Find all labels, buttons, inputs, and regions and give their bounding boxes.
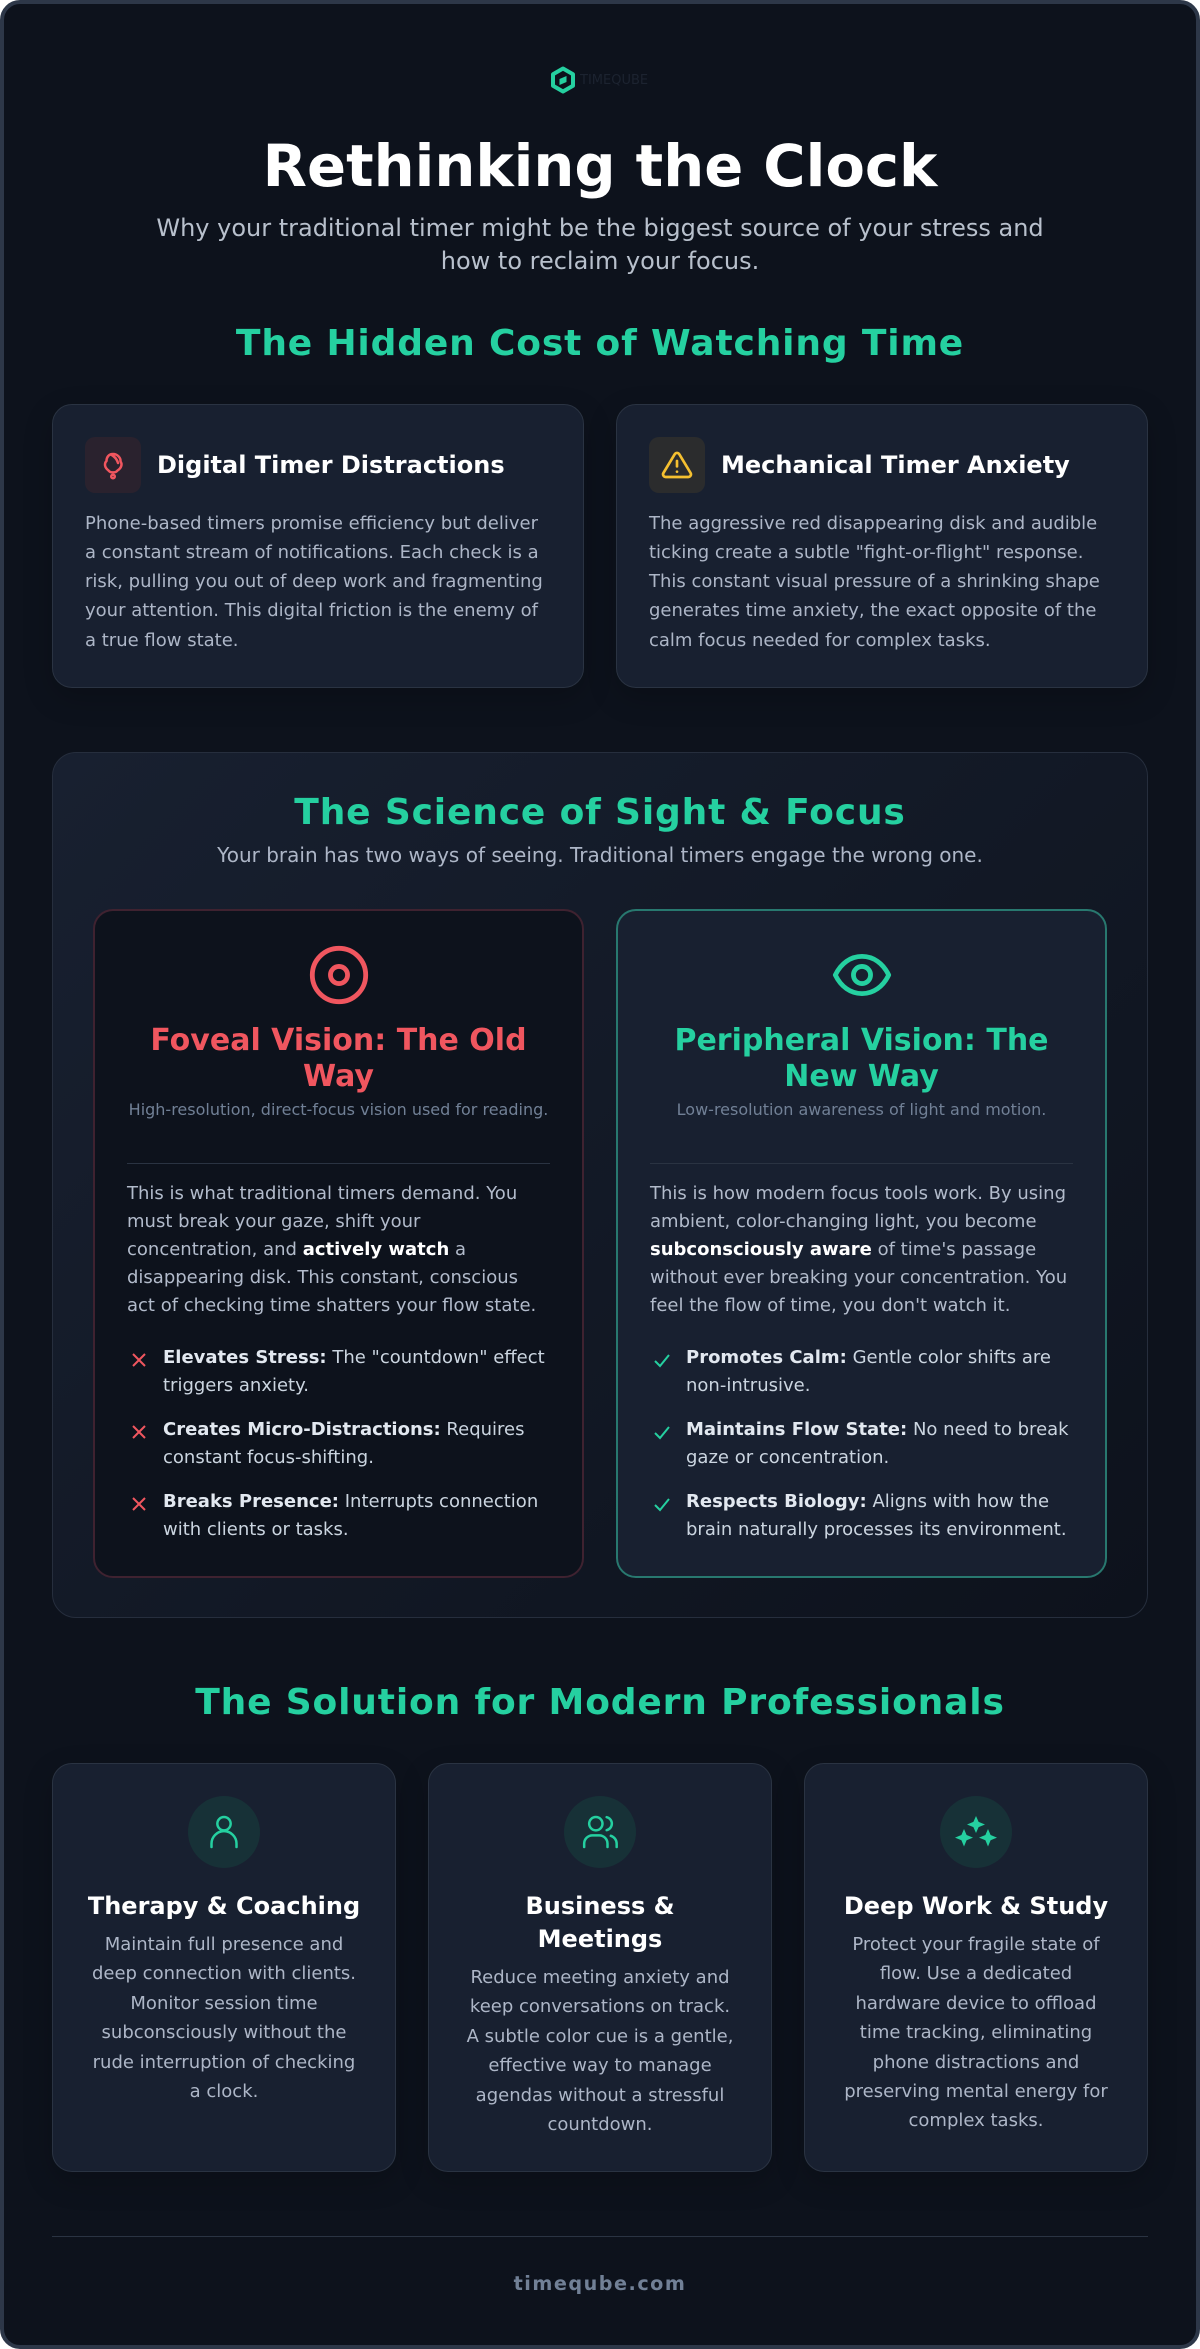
heading: solution: The Solution for Modern Professionals — [195, 1682, 1005, 1722]
foveal list item: presence: Breaks Presence: Interrupts connection — [163, 1491, 538, 1512]
card text: agendas without a stressful — [476, 2085, 724, 2106]
card text — [85, 512, 543, 651]
card title — [525, 1892, 675, 1953]
peripheral paragraph — [650, 1182, 1067, 1316]
peripheral list item: biology: brain naturally processes its environment. — [686, 1519, 1067, 1540]
card text: complex tasks. — [908, 2110, 1044, 2131]
peripheral subtitle: Low-resolution awareness of light and motion. — [677, 1100, 1046, 1119]
panel: science of sight and focus — [52, 752, 1148, 1618]
foveal paragraph: This is what traditional timers demand. You — [127, 1182, 517, 1204]
panel: deep work and study — [804, 1763, 1148, 2172]
icon: eye — [832, 954, 892, 996]
card title: Mechanical Timer Anxiety — [721, 451, 1070, 479]
card text — [92, 1934, 356, 2102]
card text: a constant stream of notifications. Each check is a — [85, 542, 539, 563]
card text: A subtle color cue is a gentle, — [467, 2026, 733, 2047]
card text: a clock. — [190, 2081, 258, 2102]
foveal heading — [150, 1022, 527, 1094]
card text: Phone-based timers promise efficiency but deliver — [85, 512, 538, 534]
card title: Therapy & Coaching — [88, 1892, 360, 1920]
card text: effective way to manage — [488, 2055, 712, 2076]
peripheral list item: calm: Promotes Calm: Gentle color shifts are — [686, 1347, 1051, 1368]
peripheral list item: flow: Maintains Flow State: No need to break — [686, 1419, 1069, 1440]
card text: hardware device to offload — [855, 1993, 1097, 2014]
card text: Reduce meeting anxiety and — [470, 1967, 730, 1988]
card text: time tracking, eliminating — [860, 2022, 1092, 2043]
panel: business and meetings — [428, 1763, 772, 2172]
card text: countdown. — [547, 2114, 653, 2135]
icon: sparkles — [940, 1796, 1012, 1868]
card text: rude interruption of checking — [93, 2052, 355, 2073]
foveal list item: stress — [132, 1347, 545, 1396]
foveal list item: presence — [132, 1491, 538, 1540]
card title: Digital Timer Distractions — [157, 451, 505, 479]
card text: This constant visual pressure of a shrinking shape — [649, 571, 1100, 592]
peripheral list item: calm: non-intrusive. — [686, 1375, 810, 1396]
card text: The aggressive red disappearing disk and audible — [649, 512, 1097, 534]
foveal list item: distractions: constant focus-shifting. — [163, 1447, 374, 1468]
card text: deep connection with clients. — [92, 1963, 356, 1984]
foveal paragraph — [126, 1182, 536, 1316]
icon: hexagon cube — [551, 66, 575, 94]
panel: peripheral vision — [616, 909, 1107, 1578]
peripheral list item: flow — [654, 1419, 1069, 1468]
heading: science: The Science of Sight & Focus — [294, 792, 906, 832]
card title: Meetings — [538, 1925, 662, 1953]
peripheral paragraph: ambient, color-changing light, you become — [650, 1211, 1037, 1232]
foveal subtitle: High-resolution, direct-focus vision used for reading. — [129, 1100, 548, 1119]
card text — [844, 1934, 1108, 2131]
panel: therapy and coaching — [52, 1763, 396, 2172]
footer: timeqube.com — [514, 2272, 686, 2294]
peripheral paragraph: This is how modern focus tools work. By using — [650, 1182, 1066, 1204]
panel: foveal vision — [93, 909, 584, 1578]
card text: Maintain full presence and — [105, 1934, 343, 1955]
foveal list item: presence: with clients or tasks. — [163, 1519, 349, 1540]
card text: your attention. This digital friction is the enemy of — [85, 600, 538, 621]
heading: hidden cost: The Hidden Cost of Watching Time — [236, 322, 964, 364]
peripheral list item: flow: gaze or concentration. — [686, 1447, 889, 1468]
foveal list item: stress: Elevates Stress: The "countdown" effect — [163, 1347, 545, 1368]
peripheral list item: calm — [654, 1347, 1051, 1396]
icon: distraction — [85, 437, 141, 493]
subtitle: Why your traditional timer might be the biggest source of your stress and — [156, 214, 1044, 242]
peripheral paragraph: without ever breaking your concentration. You — [650, 1267, 1067, 1288]
subtitle — [156, 214, 1044, 275]
peripheral paragraph: feel the flow of time, you don't watch it. — [650, 1295, 1010, 1316]
foveal heading: Way — [303, 1058, 374, 1094]
card text — [466, 1967, 733, 2135]
card text: flow. Use a dedicated — [880, 1963, 1072, 1984]
foveal list item: distractions — [132, 1419, 524, 1468]
card title: Business & — [525, 1892, 675, 1920]
card title: Deep Work & Study — [844, 1892, 1108, 1920]
card text: subconsciously without the — [102, 2022, 346, 2043]
peripheral heading: New Way — [784, 1058, 939, 1094]
icon: person — [188, 1796, 260, 1868]
peripheral heading: Peripheral Vision: The — [674, 1022, 1049, 1058]
icon: people — [564, 1796, 636, 1868]
wordmark: TIMEQUBE — [580, 73, 648, 88]
logo — [551, 66, 648, 94]
peripheral heading — [674, 1022, 1049, 1094]
card text: calm focus needed for complex tasks. — [649, 630, 991, 651]
title: Rethinking the Clock — [263, 133, 937, 200]
panel: digital timer distractions — [52, 404, 584, 688]
foveal paragraph: concentration, and actively watch a — [127, 1239, 466, 1260]
card text: ticking create a subtle "fight-or-flight" response. — [649, 542, 1083, 563]
foveal heading: Foveal Vision: The Old — [150, 1022, 527, 1058]
science subtitle: Your brain has two ways of seeing. Traditional timers engage the wrong one. — [217, 843, 983, 867]
card text: keep conversations on track. — [470, 1996, 730, 2017]
card text: a true flow state. — [85, 630, 239, 651]
foveal list item: stress: triggers anxiety. — [163, 1375, 309, 1396]
peripheral list item: biology — [654, 1491, 1067, 1540]
icon: warning triangle — [649, 437, 705, 493]
foveal paragraph: must break your gaze, shift your — [127, 1211, 420, 1232]
foveal paragraph: disappearing disk. This constant, conscious — [127, 1267, 518, 1288]
card text: Monitor session time — [130, 1993, 318, 2014]
panel: mechanical timer anxiety — [616, 404, 1148, 688]
card text: phone distractions and — [873, 2052, 1079, 2073]
foveal list item: distractions: Creates Micro-Distractions: Requires — [163, 1419, 524, 1440]
icon: target — [310, 946, 368, 1004]
foveal paragraph: act of checking time shatters your flow state. — [127, 1295, 536, 1316]
card text: risk, pulling you out of deep work and fragmenting — [85, 571, 543, 592]
card text: generates time anxiety, the exact opposite of the — [649, 600, 1096, 621]
subtitle: how to reclaim your focus. — [441, 247, 759, 275]
peripheral list item: biology: Respects Biology: Aligns with how the — [686, 1491, 1049, 1512]
card text: preserving mental energy for — [844, 2081, 1108, 2102]
peripheral paragraph: subconsciously aware of time's passage — [650, 1239, 1036, 1260]
card text: Protect your fragile state of — [852, 1934, 1100, 1955]
card text — [648, 512, 1100, 651]
